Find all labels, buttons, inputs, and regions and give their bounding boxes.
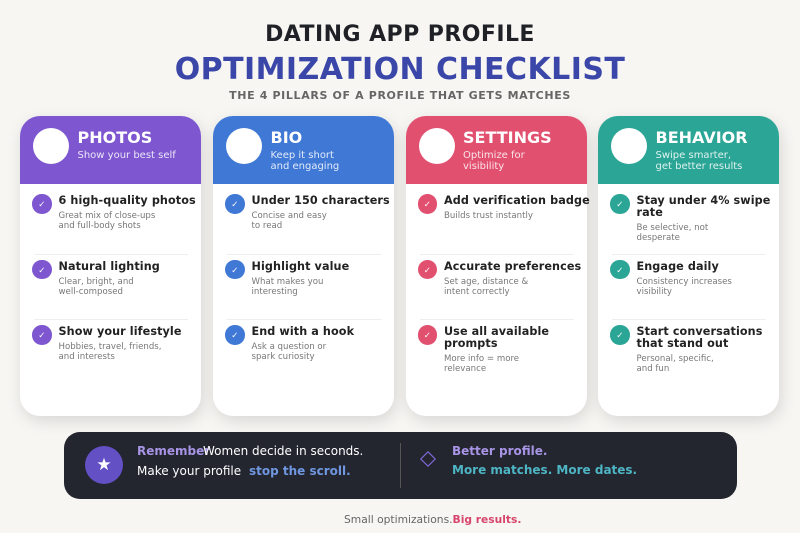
behavior item 3: that stand out [636, 337, 728, 350]
icon: diamond [420, 451, 436, 467]
callout: remember text: stop the scroll. [249, 464, 351, 478]
settings item 2: ✓ [424, 266, 431, 276]
footer: Small optimizations.Big results. [344, 513, 521, 526]
title: dating app profile: DATING APP PROFILE [265, 22, 535, 47]
behavior item 2: Consistency increases [636, 276, 732, 286]
callout: remember text: Women decide in seconds. [203, 444, 363, 458]
photos item 2: well-composed [58, 286, 123, 296]
settings item 3: More info = more [444, 354, 519, 364]
behavior item 1: Be selective, not [636, 223, 708, 233]
bio item 2: interesting [252, 286, 298, 296]
settings item 2: Set age, distance & [444, 276, 528, 286]
behavior header: get better results [656, 160, 742, 172]
photos item 3: and interests [58, 352, 115, 362]
bio header: Keep it short [270, 150, 334, 160]
callout: remember text [137, 444, 363, 478]
photos item 3: ✓ [38, 331, 45, 341]
photos item 1 [32, 194, 196, 231]
bio item 2: ✓ [231, 266, 238, 276]
photos item 1: and full-body shots [58, 221, 141, 231]
settings item 2 [418, 260, 581, 296]
bio item 1: Concise and easy [252, 211, 327, 221]
settings item 2: intent correctly [444, 286, 510, 296]
bio header [213, 116, 394, 184]
behavior item 3: ✓ [616, 331, 623, 341]
behavior item 3: Start conversations [636, 325, 762, 338]
settings item 1: Builds trust instantly [444, 211, 533, 221]
photos item 3: Hobbies, travel, friends, [58, 342, 161, 352]
panel: photos [20, 116, 201, 416]
bio item 3: End with a hook [252, 325, 354, 338]
settings item 3: relevance [444, 364, 486, 374]
bio item 1: ✓ [231, 200, 238, 210]
panel: behavior [598, 116, 779, 416]
settings item 3: ✓ [424, 331, 431, 341]
behavior item 1: rate [636, 206, 663, 219]
behavior item 1 [610, 194, 770, 243]
photos item 2: Natural lighting [58, 260, 160, 272]
bio item 3: spark curiosity [252, 352, 315, 362]
panel: settings [406, 116, 586, 416]
bio item 3: Ask a question or [252, 342, 326, 352]
behavior header: BEHAVIOR [656, 128, 748, 147]
bio item 1: Under 150 characters [252, 194, 390, 207]
settings header [406, 116, 586, 184]
photos item 1: 6 high-quality photos [58, 194, 196, 207]
settings item 3 [418, 325, 549, 374]
photos header: Show your best self [78, 150, 176, 160]
photos header: PHOTOS [78, 128, 152, 147]
settings item 3: Use all available [444, 325, 549, 338]
callout bar [64, 432, 737, 499]
bio header: BIO [270, 128, 302, 147]
photos item 3 [32, 325, 182, 362]
icon: star: ★ [96, 455, 112, 475]
callout: better profile text: More matches. More dates. [452, 463, 637, 477]
behavior item 1: ✓ [616, 200, 623, 210]
behavior item 2: ✓ [616, 266, 623, 276]
photos header [20, 116, 201, 184]
settings header: Optimize for [463, 150, 525, 160]
callout: remember text: Make your profile [137, 464, 241, 478]
bio item 3: ✓ [231, 331, 238, 341]
behavior item 2 [610, 260, 732, 296]
behavior item 1: Stay under 4% swipe [636, 194, 770, 207]
icon: star [85, 446, 123, 484]
bio item 2: What makes you [252, 276, 323, 286]
photos item 3: Show your lifestyle [58, 325, 182, 338]
bio item 1: to read [252, 221, 282, 231]
photos item 2 [32, 260, 160, 296]
behavior header: Swipe smarter, [656, 150, 731, 160]
behavior item 3 [610, 325, 762, 374]
bio header: and engaging [270, 160, 339, 172]
bio item 3 [225, 325, 354, 362]
title: optimization checklist: OPTIMIZATION CHECKLIST [175, 52, 625, 87]
settings header: SETTINGS [463, 128, 552, 147]
photos item 2: ✓ [38, 266, 45, 276]
callout: better profile text [452, 444, 637, 477]
settings item 3: prompts [444, 337, 498, 350]
settings item 2: Accurate preferences [444, 260, 581, 272]
behavior item 3: Personal, specific, [636, 354, 714, 364]
behavior item 1: desperate [636, 233, 680, 243]
behavior item 3: and fun [636, 364, 669, 374]
behavior item 2: Engage daily [636, 260, 719, 272]
photos item 1: ✓ [38, 200, 45, 210]
behavior header [598, 116, 779, 184]
callout: remember text: Remember [137, 444, 210, 458]
panel: bio [213, 116, 394, 416]
callout: better profile text: Better profile. [452, 444, 547, 458]
behavior item 2: visibility [636, 286, 672, 296]
bio item 1 [225, 194, 390, 231]
settings header: visibility [463, 160, 504, 172]
bio item 2 [225, 260, 349, 296]
photos item 1: Great mix of close-ups [58, 211, 155, 221]
settings item 1: Add verification badge [444, 194, 590, 207]
bio item 2: Highlight value [252, 260, 349, 272]
settings item 1 [418, 194, 590, 221]
photos item 2: Clear, bright, and [58, 276, 134, 286]
settings item 1: ✓ [424, 200, 431, 210]
subtitle: THE 4 PILLARS OF A PROFILE THAT GETS MATCHES [229, 89, 571, 102]
